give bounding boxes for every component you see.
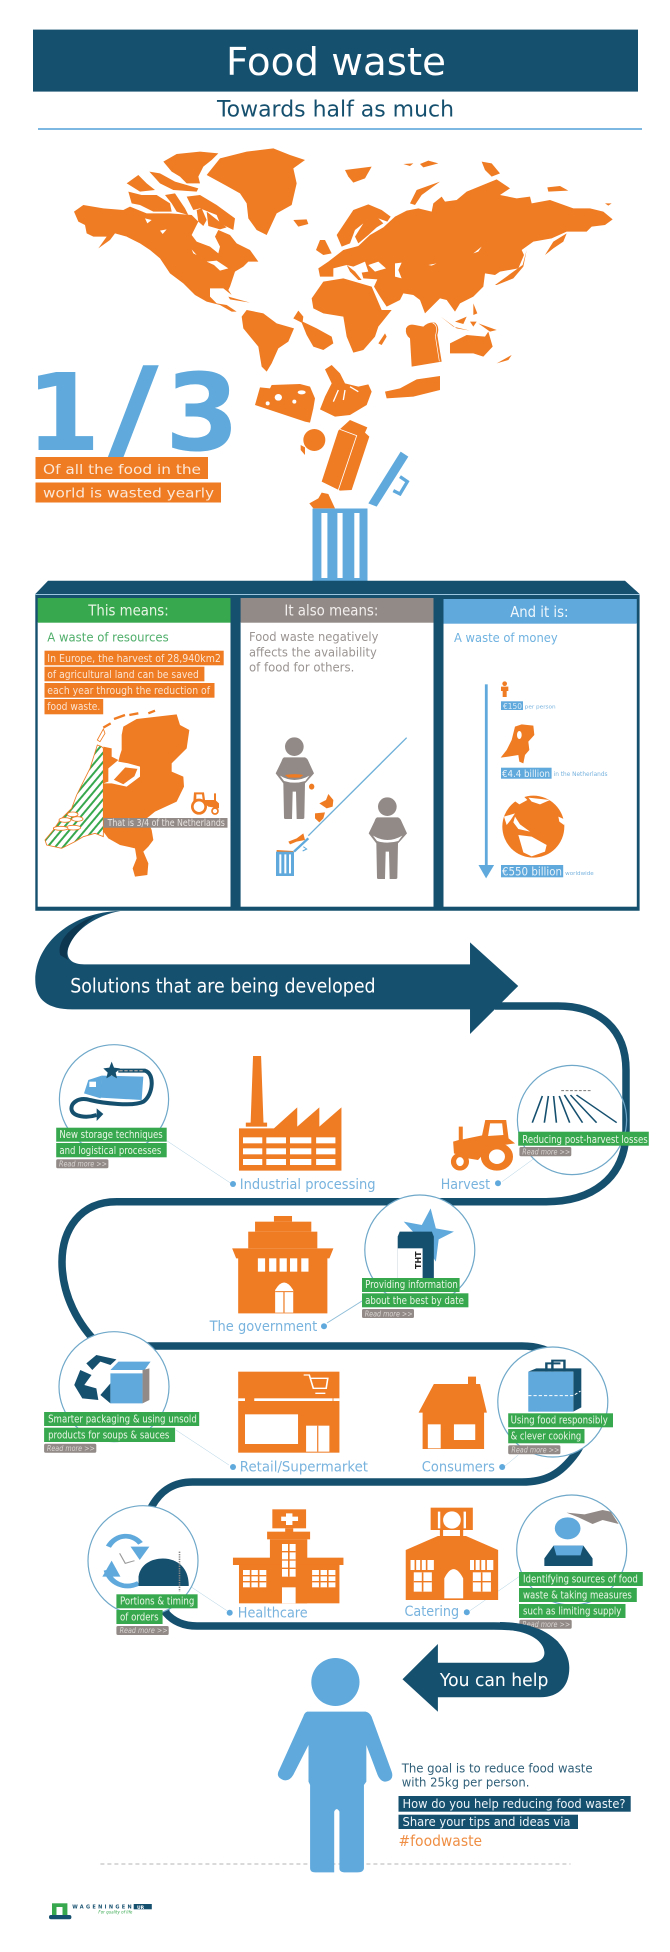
catering icon (406, 1508, 498, 1600)
panel: and it is: And it is: (510, 603, 568, 621)
label: sources (519, 1572, 643, 1629)
logo: UR (137, 1905, 145, 1911)
label: packaging (44, 1412, 199, 1453)
ribbon arrow: you can help (402, 1622, 569, 1712)
people and food illustration (276, 737, 407, 879)
ribbon arrow: solutions (35, 911, 518, 1034)
label: portions: of orders (120, 1611, 159, 1623)
label: sources: Identifying sources of food (523, 1573, 638, 1585)
small icons (501, 681, 566, 858)
area caption (104, 818, 228, 828)
circle: storage (59, 1045, 169, 1154)
house icon (419, 1377, 487, 1449)
label: storage: and logistical processes (59, 1145, 161, 1157)
panel: this means: of agricultural land can be saved (47, 669, 199, 681)
label: storage (56, 1128, 167, 1168)
scale arrow (478, 684, 494, 878)
label: packaging: Read more >> (47, 1444, 95, 1453)
label: cooking: Using food responsibly (511, 1415, 608, 1427)
label: sources: Read more >> (522, 1620, 570, 1629)
bottle (385, 376, 440, 398)
ribbon arrow: solutions: Solutions that are being developed (70, 974, 376, 998)
panel: and it is: €4.4 billion (502, 769, 550, 780)
panel: it also means (241, 598, 434, 879)
label: portions: Portions & timing (120, 1596, 194, 1608)
circle: packaging (59, 1332, 169, 1442)
one third figure (26, 343, 239, 480)
ribbon arrow: you can help: You can help (439, 1671, 548, 1691)
panel: and it is: A waste of money (454, 630, 558, 645)
panel: it also means: of food for others. (249, 660, 354, 674)
label: harvest (518, 1132, 649, 1156)
apple (303, 429, 325, 451)
panel: and it is: worldwide (565, 871, 594, 877)
call to action: The goal is to reduce food waste (401, 1760, 593, 1776)
circle: harvest (517, 1065, 627, 1175)
world map: americas (74, 148, 333, 372)
bread (406, 322, 442, 367)
logo: WAGENINGEN (72, 1904, 132, 1910)
subtitle: Towards half as much (216, 98, 454, 122)
label: storage: New storage techniques (59, 1129, 163, 1141)
label: best by date: about the best by date (365, 1295, 464, 1307)
label: sources: waste & taking measures (523, 1589, 632, 1601)
tractor icon large (453, 1120, 515, 1168)
heading: the government (209, 1301, 362, 1335)
title (33, 30, 638, 92)
one third caption: Of all the food in the (43, 462, 201, 478)
panel: this means: In Europe, the harvest of 28,940km2 (47, 653, 221, 665)
circle: cooking (498, 1347, 608, 1457)
label: packaging: products for soups & sauces (48, 1429, 169, 1441)
label: best by date: Read more >> (365, 1310, 413, 1318)
panel: it also means: affects the availability (249, 644, 377, 660)
heading: the government: The government (209, 1319, 318, 1335)
trash bin (312, 508, 368, 585)
netherlands map (45, 711, 189, 877)
panel: and it is: per person (525, 704, 556, 710)
one third figure: / (106, 343, 160, 480)
food on bin (309, 493, 335, 508)
bin lid (368, 452, 408, 507)
one third caption (36, 457, 221, 502)
panel: this means (38, 598, 231, 877)
circle: best by date (365, 1195, 475, 1305)
person (278, 1658, 392, 1872)
label: storage: Read more >> (59, 1160, 107, 1168)
panel: and it is: €150 (503, 702, 522, 711)
world map: eurasia, africa, australia (312, 161, 613, 367)
label: packaging: Smarter packaging & using unsold (48, 1413, 197, 1425)
panel: this means: This means: (87, 602, 169, 620)
circle: portions (88, 1506, 198, 1616)
one third caption: world is wasted yearly (43, 486, 214, 502)
panel: and it is: €550 billion (502, 864, 562, 878)
label: cooking: & clever cooking (511, 1431, 581, 1443)
panel: it also means: It also means: (284, 602, 378, 620)
label: portions (116, 1594, 198, 1635)
winding route (62, 1006, 626, 1645)
call to action: Share your tips and ideas via (402, 1814, 570, 1829)
retail icon (238, 1372, 339, 1453)
one third figure: 3 (165, 352, 239, 476)
circle: sources (517, 1495, 627, 1605)
heading: retail: Retail/Supermarket (240, 1460, 368, 1476)
government building (232, 1216, 333, 1313)
milk carton (322, 420, 369, 491)
logo (49, 1903, 152, 1919)
circle: best by date: THT (414, 1251, 423, 1269)
label: harvest: Read more >> (522, 1148, 570, 1156)
money labels (501, 701, 523, 710)
call to action: How do you help reducing food waste? (402, 1796, 626, 1811)
hospital icon (233, 1509, 343, 1603)
label: best by date (362, 1278, 468, 1318)
label: portions: Read more >> (120, 1626, 168, 1635)
panel: this means: each year through the reduction of (47, 685, 210, 697)
panel: this means: food waste. (47, 701, 100, 713)
call to action: with 25kg per person. (402, 1774, 530, 1790)
falling food (255, 365, 440, 508)
panel: this means: That is 3/4 of the Netherlands (107, 818, 225, 829)
chicken leg (293, 311, 333, 350)
title: Food waste (226, 40, 446, 84)
label: sources: such as limiting supply (523, 1605, 621, 1617)
call to action: #foodwaste (398, 1832, 482, 1850)
cheese (255, 384, 315, 423)
one third figure: 1 (26, 352, 100, 476)
panel: and it is: in the Netherlands (554, 771, 608, 778)
heading: industrial processing: Industrial processing (240, 1177, 376, 1193)
panel: this means: A waste of resources (47, 630, 169, 644)
heading: catering: Catering (404, 1604, 459, 1620)
heading: harvest: Harvest (441, 1177, 490, 1193)
label: cooking: Read more >> (511, 1446, 559, 1454)
label: cooking (508, 1413, 613, 1454)
broccoli (320, 365, 372, 417)
panel: it also means: Food waste negatively (249, 629, 379, 644)
panel frame (35, 581, 640, 911)
tractor icon (192, 792, 219, 814)
factory icon (239, 1056, 341, 1171)
icons row 1 (167, 1056, 534, 1313)
label: best by date: Providing information (365, 1279, 458, 1291)
call to action (398, 1760, 631, 1850)
leaders row 1 (167, 1141, 534, 1183)
panel: and it is (444, 599, 637, 878)
icons row 2 and 3 (176, 1372, 519, 1611)
logo: For quality of life (98, 1910, 133, 1916)
heading: healthcare: Healthcare (238, 1606, 308, 1622)
heading: consumers: Consumers (422, 1460, 495, 1476)
